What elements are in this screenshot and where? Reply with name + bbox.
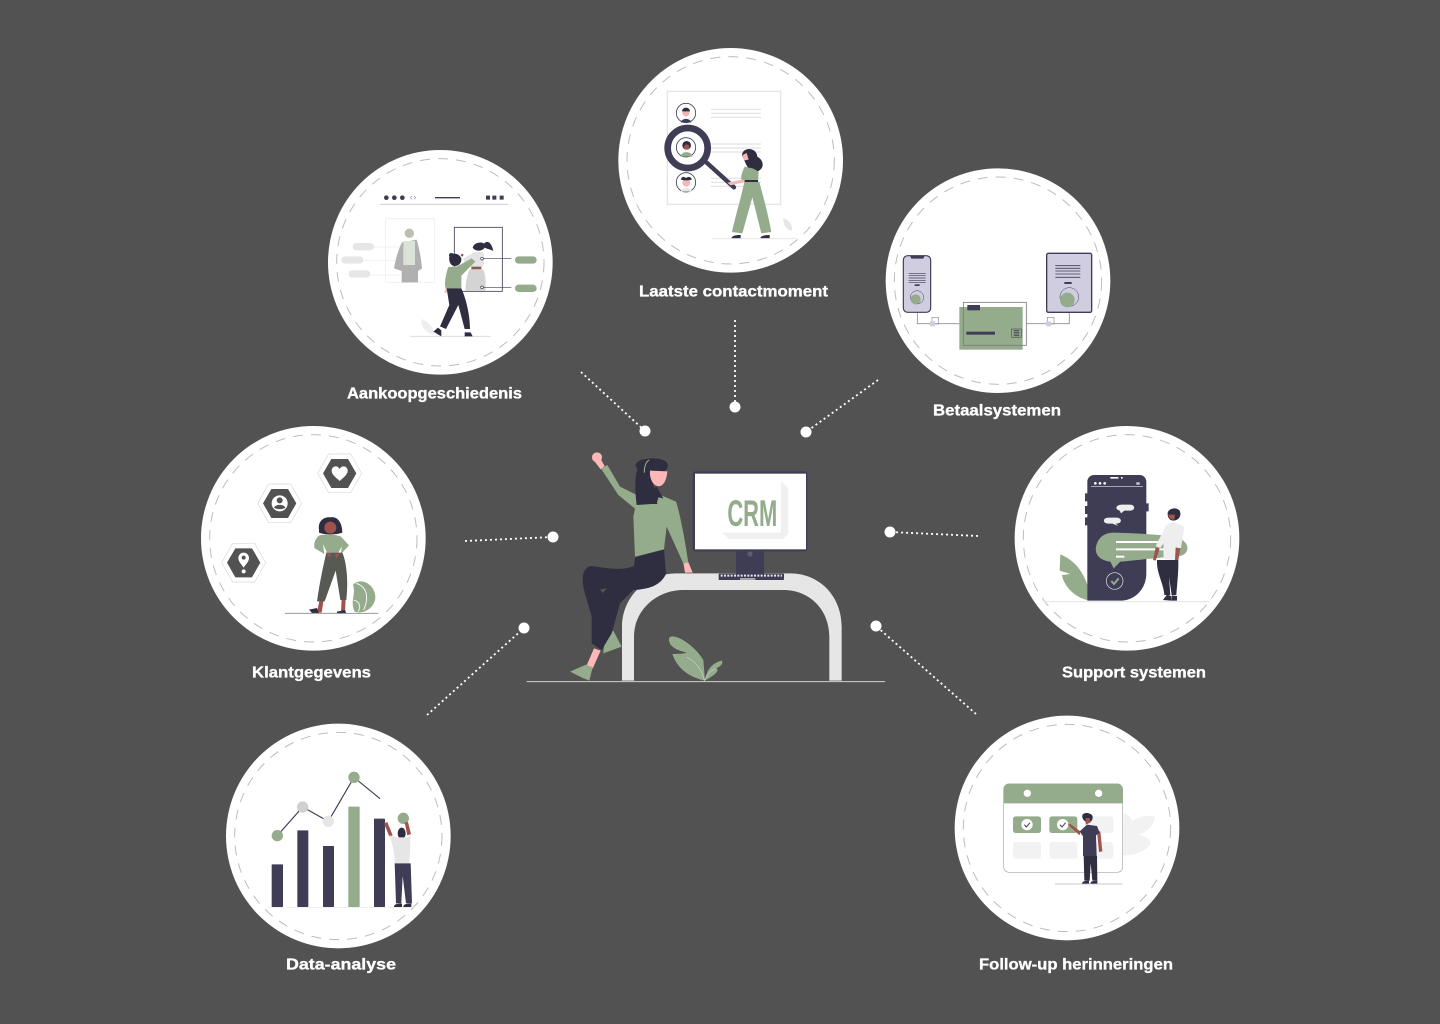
icon: person hexagon xyxy=(258,484,302,523)
label: Klantgegevens: Klantgegevens xyxy=(252,664,371,682)
icon: leaf xyxy=(1044,554,1210,602)
panel: Aankoopgeschiedenis xyxy=(328,150,553,375)
CRM monitor xyxy=(693,471,807,580)
figure: woman pointing xyxy=(410,253,491,336)
icon: plant xyxy=(669,636,722,681)
label: Betaalsystemen: Betaalsystemen xyxy=(933,402,1061,420)
figure: woman with magnifier xyxy=(712,149,797,239)
panel: Data-analyse xyxy=(226,724,451,948)
CRM logo text: CRM xyxy=(727,492,777,534)
selected product card xyxy=(454,227,537,292)
label: Laatste contactmoment: Laatste contactmoment xyxy=(639,284,828,300)
figure: man holding bubble xyxy=(1153,508,1184,601)
connectors: dotted lines with end dots xyxy=(427,320,978,715)
desk xyxy=(622,573,842,681)
panel: Klantgegevens xyxy=(201,426,426,651)
panel: Support systemen xyxy=(1015,426,1239,651)
icon: heart hexagon xyxy=(318,454,362,493)
faded product card xyxy=(341,219,434,282)
icon: tablet xyxy=(1047,253,1092,312)
label: Follow-up herinneringen: Follow-up herinneringen xyxy=(979,956,1173,974)
figure: woman standing xyxy=(285,517,378,614)
faded plant xyxy=(1122,813,1155,855)
figure: man ticking calendar xyxy=(1055,813,1123,884)
icon: phone xyxy=(903,256,931,312)
wiring xyxy=(917,312,1069,326)
icon: magnifying glass xyxy=(668,128,734,187)
label: Support systemen: Support systemen xyxy=(1062,664,1206,682)
figure: woman waving xyxy=(570,452,693,681)
label: Data-analyse: Data-analyse xyxy=(286,956,396,974)
bar chart xyxy=(268,807,415,907)
panel: Follow-up herinneringen xyxy=(955,716,1179,940)
chat bubble xyxy=(1096,533,1187,568)
panel: Betaalsystemen xyxy=(886,168,1110,393)
icon: plant xyxy=(353,581,375,612)
panel: Laatste contactmoment xyxy=(618,48,843,273)
label: Aankoopgeschiedenis: Aankoopgeschiedenis xyxy=(347,386,522,402)
calendar xyxy=(1004,784,1123,872)
browser bar xyxy=(380,195,508,204)
line chart xyxy=(272,772,380,841)
phone with chat xyxy=(1085,475,1149,601)
icon: location hexagon xyxy=(222,543,266,582)
icon: bank card xyxy=(959,302,1026,350)
document with avatars xyxy=(667,91,781,204)
central illustration: woman at CRM desk xyxy=(527,452,885,682)
figure: person placing data point xyxy=(384,813,412,907)
